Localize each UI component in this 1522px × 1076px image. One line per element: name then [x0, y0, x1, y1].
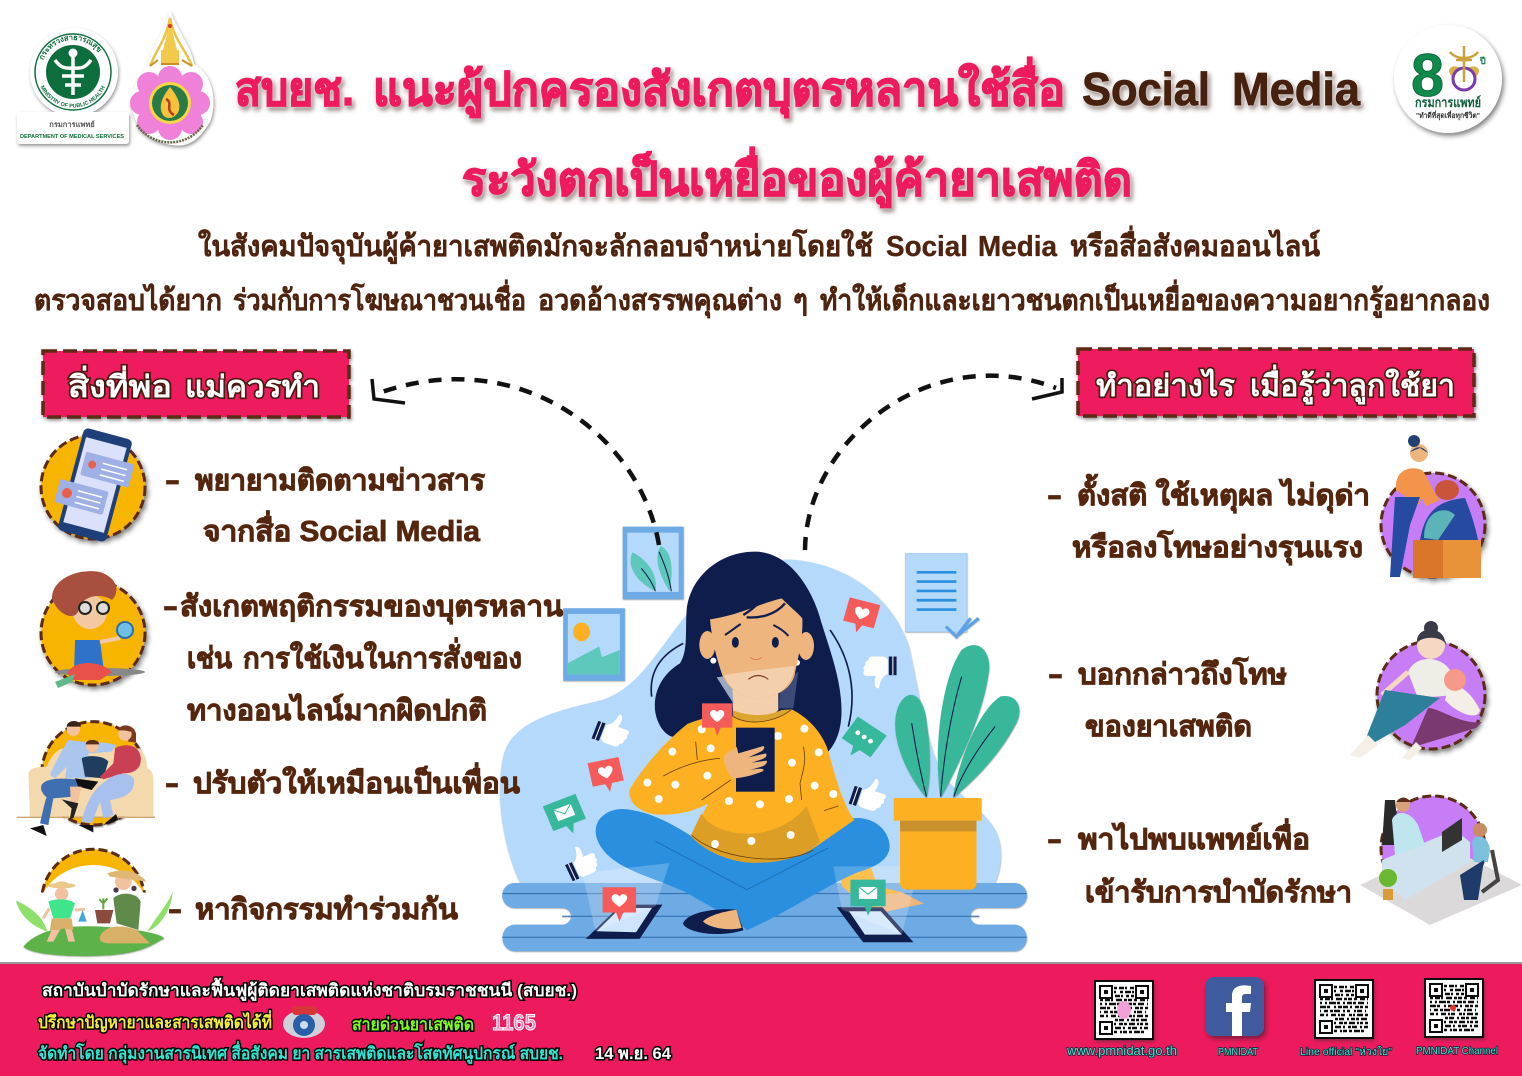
right item 2: text	[1048, 656, 1287, 743]
title line 1 english: Media: Media	[1232, 63, 1360, 115]
intro paragraph: อวดอ้างสรรพคุณต่าง	[538, 285, 782, 318]
left item 3: text: ปรับตัวให้เหมือนเป็นเพื่อน	[193, 762, 520, 800]
title	[235, 57, 1360, 208]
central illustration: worried girl with phone	[500, 527, 1027, 951]
icon: facebook	[1205, 977, 1264, 1036]
polka dots	[643, 725, 837, 848]
right item 1: text: -	[1047, 480, 1062, 512]
left item 1: text: -	[165, 465, 180, 497]
heading badge: what parents should do: สิ่งที่พ่อ	[68, 365, 172, 404]
floating reaction icons	[543, 597, 897, 921]
right item 3: text: เข้ารับการบำบัดรักษา	[1085, 877, 1352, 909]
title line 1 english: Social: Social	[1082, 63, 1210, 115]
heading badge: what parents should do: แม่ควรทำ	[185, 371, 320, 404]
title line 1 thai: abbreviation: สบยช.	[235, 63, 354, 115]
left item 4: gardening together icon	[16, 849, 173, 972]
footer: hotline number: 1165	[492, 1010, 536, 1035]
right item 3: text: -	[1047, 824, 1062, 856]
right item 3: doctor consultation icon	[1360, 796, 1522, 925]
heading badge: what to do when child uses drugs: เมื่อรู้ว่าลูกใช้ยา	[1250, 364, 1455, 405]
QR code: Line official	[1315, 980, 1373, 1038]
left item 1: text	[165, 465, 485, 548]
foot	[683, 909, 743, 934]
left item 1: text: จากสื่อ Social Media	[203, 510, 481, 548]
left item 2: text: เช่น	[187, 643, 232, 675]
heading badge: what to do when child uses drugs: ทำอย่างไร	[1096, 368, 1235, 403]
left item 4: text: หากิจกรรมทำร่วมกัน	[195, 894, 458, 926]
title line 1 thai: แนะผู้ปกครองสังเกตบุตรหลานใช้สื่อ	[373, 57, 1065, 118]
left item 4: text: -	[168, 894, 182, 926]
document	[905, 553, 979, 637]
logo: Ministry of Public Health	[16, 28, 132, 148]
ears	[699, 631, 715, 659]
logo: 80 years department of medical services: กรมการแพทย์	[1415, 95, 1481, 110]
intro paragraph: ร่วมกับการโฆษณาชวนเชื่อ	[233, 279, 526, 317]
hair	[655, 552, 842, 753]
girl upper body	[629, 552, 854, 863]
intro paragraph: ๆ	[793, 285, 808, 317]
QR code: website	[1095, 981, 1153, 1039]
icon: telephone hotline	[283, 1006, 325, 1038]
label: channel: PMNIDAT Channel	[1416, 1046, 1498, 1057]
label: Line official: Line official "ห่วงใย"	[1300, 1046, 1392, 1058]
left item 2: text: ทางออนไลน์มากผิดปกติ	[187, 693, 487, 727]
left item 1: text: พยายามติดตามข่าวสาร	[195, 465, 485, 497]
footer: date: 14 พ.ย. 64	[595, 1044, 672, 1063]
neck	[732, 680, 778, 719]
logo: institute lotus	[130, 10, 213, 146]
tablet right	[837, 907, 913, 942]
left item 2: text: การใช้เงินในการสั่งของ	[243, 637, 522, 675]
sweater	[629, 709, 854, 863]
tablet light beams	[582, 863, 670, 931]
right item 2: text: ของยาเสพติด	[1085, 711, 1252, 743]
footer: produced by: จัดทำโดย กลุ่มงานสารนิเทศ สื่อสังคม ยา สารเสพติดและโสตทัศนูปกรณ์ สบยช.	[38, 1041, 563, 1065]
picture frame: landscape	[563, 608, 625, 681]
right item 2: text: บอกกล่าวถึงโทษ	[1078, 656, 1287, 691]
right item 2: text: -	[1048, 659, 1063, 691]
heading badge: what to do when child uses drugs	[1078, 349, 1474, 416]
legs	[596, 809, 890, 930]
QR code: channel	[1425, 979, 1483, 1037]
phone	[736, 728, 775, 792]
right item 3: text: พาไปพบแพทย์เพื่อ	[1078, 818, 1310, 856]
picture frame: leaves	[623, 527, 684, 599]
right item 1: text: หรือลงโทษอย่างรุนแรง	[1072, 529, 1363, 565]
background blob	[500, 560, 1001, 886]
face	[710, 598, 802, 698]
left item 2: boy with magnifier icon	[41, 571, 145, 688]
left item 2: text: สังเกตพฤติกรรมของบุตรหลาน	[180, 591, 563, 624]
hand	[724, 746, 767, 778]
background scene	[500, 527, 1027, 951]
logo: 80 years department of medical services: ปี	[1479, 56, 1486, 66]
footer: hotline label: สายด่วนยาเสพติด	[352, 1015, 474, 1034]
label: website: www.pmnidat.go.th	[1066, 1043, 1177, 1058]
intro paragraph: ในสังคมปัจจุบันผู้ค้ายาเสพติดมักจะลักลอบจำหน่ายโดยใช้	[198, 228, 873, 264]
intro paragraph: Social	[886, 231, 968, 263]
intro paragraph: Media	[978, 231, 1058, 263]
left item 2: text: -	[163, 591, 178, 623]
floor boards	[502, 883, 1027, 951]
logo: Ministry of Public Health: กระทรวงสาธารณสุข	[40, 36, 102, 60]
right item 1: text: ตั้งสติ ใช้เหตุผล ไม่ดุด่า	[1077, 473, 1370, 513]
logo: 80 years department of medical services: 8	[1411, 42, 1444, 109]
arrow: to right column	[805, 376, 1062, 550]
pot	[894, 798, 982, 890]
right arm and hand on floor	[828, 803, 924, 915]
title line 2: ระวังตกเป็นเหยื่อของผู้ค้ายาเสพติด	[462, 147, 1132, 208]
footer band	[0, 962, 1522, 1076]
tablet left	[586, 905, 662, 939]
intro paragraph: หรือสื่อสังคมออนไลน์	[1070, 225, 1320, 263]
logo: Ministry of Public Health: DEPARTMENT OF MEDICAL SERVICES	[20, 134, 125, 140]
left item 2: text	[163, 591, 563, 727]
intro paragraph	[34, 225, 1490, 318]
footer: consult line: ปรึกษาปัญหายาและสารเสพติดได้ที่	[38, 1010, 272, 1033]
logo: 80 years department of medical services: "ทำดีที่สุดเพื่อทุกชีวิต"	[1416, 109, 1480, 120]
left item 3: text: -	[165, 768, 179, 800]
left item 3: family on sofa icon	[17, 721, 155, 836]
left item 1: phone icon	[41, 425, 145, 545]
logo: Ministry of Public Health: MINISTRY OF PUBLIC HEALTH	[40, 85, 105, 108]
right item 3: text	[1047, 818, 1352, 909]
intro paragraph: ตรวจสอบได้ยาก	[34, 283, 222, 317]
plant leaves	[895, 645, 1019, 798]
right item 1: comforting woman icon	[1381, 435, 1485, 578]
label: facebook: PMNIDAT	[1218, 1047, 1258, 1058]
heading badge: what parents should do	[43, 351, 349, 417]
logo: 80 years department of medical services	[1394, 25, 1502, 133]
footer: institute name: สถาบันบำบัดรักษาและฟื้นฟูผู้ติดยาเสพติดแห่งชาติบรมราชชนนี (สบยช.)	[42, 977, 577, 1002]
logo: Ministry of Public Health: กรมการแพทย์	[49, 120, 95, 129]
right item 1: text	[1047, 473, 1370, 565]
right item 2: mother and teen icon	[1350, 621, 1485, 760]
heart bubble on chest	[702, 703, 732, 736]
arrow: to left column	[372, 379, 659, 545]
